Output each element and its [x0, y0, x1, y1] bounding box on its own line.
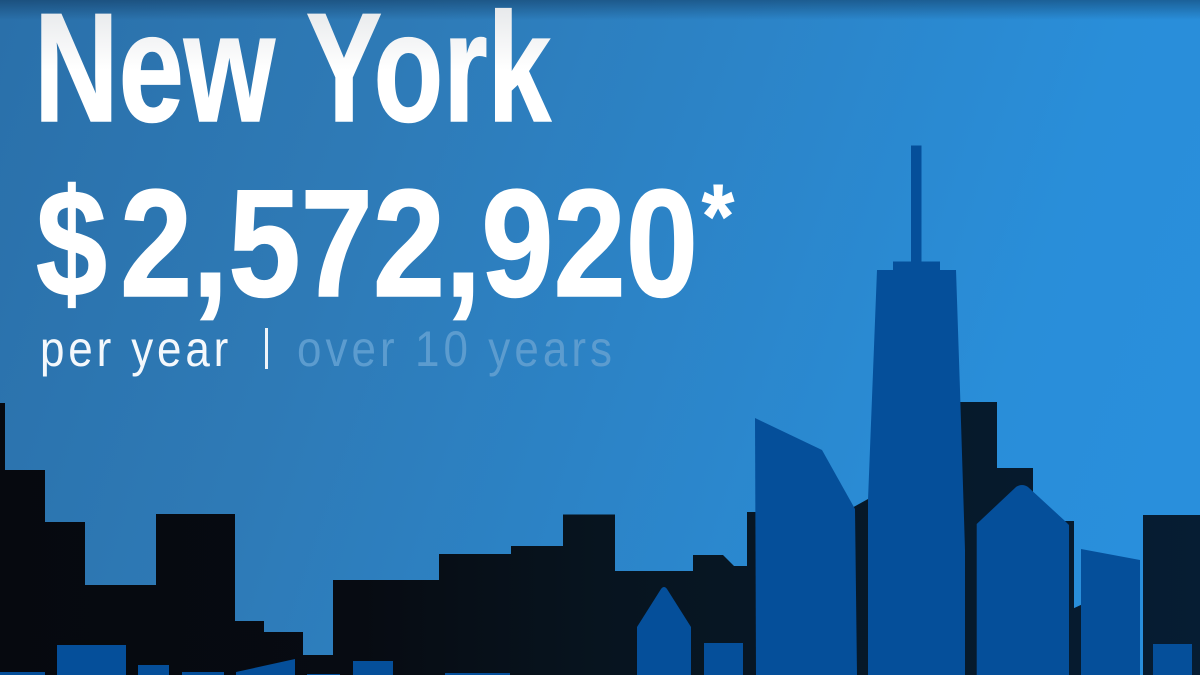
subtitle: over 10 years: over 10 years [297, 320, 612, 377]
separator bar [265, 328, 268, 369]
skyline: dark background buildings [0, 402, 1200, 675]
peaked building [977, 485, 1069, 675]
amount: $2,572,920*: $ [36, 158, 107, 329]
amount: $2,572,920*: 2,572,920 [120, 158, 698, 329]
skyline: blue foreground buildings [0, 146, 1192, 675]
angled-roof building [755, 418, 857, 675]
sloped-roof building [1081, 549, 1140, 675]
tower with spire [868, 146, 965, 675]
subtitle: per year: per year [40, 320, 228, 377]
low rooftops [0, 643, 1192, 675]
title: New York [34, 0, 552, 154]
small peaked building [637, 587, 691, 675]
amount: $2,572,920*: * [702, 167, 734, 267]
